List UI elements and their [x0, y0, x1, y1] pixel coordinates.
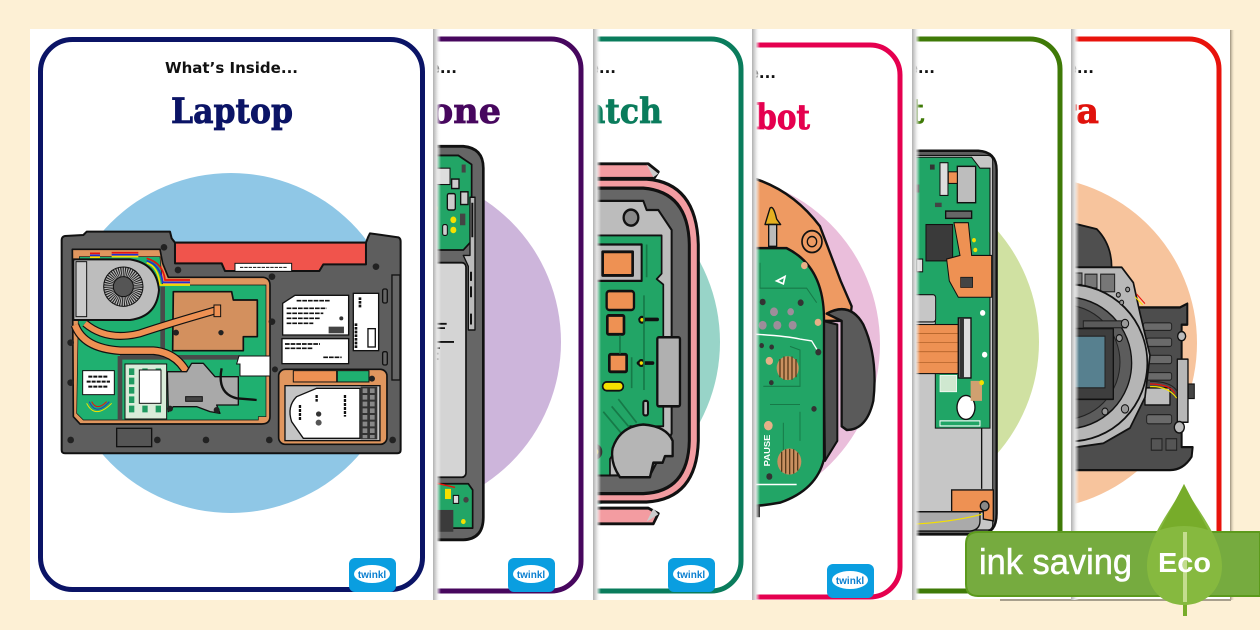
RAM and heat sink — [125, 364, 167, 419]
watch title: Smartwatch — [450, 90, 662, 131]
logo: twinkl — [508, 558, 555, 592]
logo: twinkl — [349, 558, 396, 592]
camera poster border — [900, 39, 1219, 591]
robot poster border — [580, 45, 900, 597]
copper plate — [173, 292, 257, 351]
tablet circle — [699, 172, 1039, 512]
camera heading: What’s Inside... — [961, 59, 1094, 77]
laptop circle — [61, 173, 401, 513]
hard drive — [279, 369, 387, 444]
left board labels — [83, 371, 114, 395]
leaf stem tail — [1183, 600, 1187, 616]
sticker labels — [283, 295, 349, 335]
icon: tablet internals — [883, 151, 997, 534]
banner label: ink saving — [979, 541, 1132, 582]
panel: tablet poster — [699, 29, 1079, 600]
banner bar — [966, 532, 1260, 596]
watch circle — [380, 172, 720, 512]
laptop title: Laptop — [171, 91, 293, 132]
phone circle — [221, 172, 561, 512]
panel: robot poster — [540, 29, 920, 600]
cables — [90, 253, 190, 280]
icon: laptop internals — [62, 232, 401, 453]
main compartment — [72, 249, 270, 424]
icon: leaf drop — [1147, 484, 1222, 605]
watch heading: What’s Inside... — [483, 59, 616, 77]
screws — [67, 244, 396, 443]
eco banner — [966, 484, 1260, 616]
robot title: Robot — [712, 97, 810, 138]
panel: camera poster — [863, 29, 1235, 601]
leaf stem — [1183, 532, 1187, 602]
phone title: Smartphone — [260, 91, 501, 132]
leaf top shade — [1160, 484, 1208, 530]
panel: smartphone poster — [221, 29, 601, 600]
icon: robot internals — [743, 175, 875, 517]
phone poster border — [260, 39, 581, 591]
logo: twinkl: twinkl — [677, 570, 705, 581]
tablet poster border — [740, 39, 1060, 591]
phone heading: What’s Inside... — [324, 59, 457, 77]
panel: laptop poster — [30, 29, 441, 600]
watch poster border — [420, 39, 741, 591]
inner dividers — [120, 287, 240, 420]
icon: watch internals — [587, 164, 698, 524]
robot heading: What’s Inside... — [643, 64, 776, 82]
logo: twinkl: twinkl — [836, 576, 864, 587]
fan — [73, 259, 159, 320]
icon: robot internals: PAUSE — [762, 435, 772, 466]
icon: camera internals — [993, 218, 1194, 470]
laptop base — [62, 232, 401, 453]
robot circle — [540, 174, 880, 514]
logo: twinkl — [827, 564, 874, 598]
latch — [117, 428, 152, 447]
logo: twinkl — [668, 558, 715, 592]
laptop heading: What’s Inside... — [165, 59, 298, 77]
logo: twinkl: twinkl — [358, 570, 386, 581]
camera circle — [863, 176, 1197, 510]
icon: phone internals — [427, 146, 483, 540]
heat pipes — [85, 310, 217, 336]
eco label: Eco — [1158, 547, 1211, 578]
logo: twinkl: twinkl — [517, 570, 545, 581]
tablet heading: What’s Inside... — [802, 59, 935, 77]
tablet title: Tablet — [802, 91, 924, 132]
side slots — [392, 275, 400, 380]
camera title: Camera — [948, 91, 1099, 132]
panel: smartwatch poster — [380, 29, 760, 600]
laptop poster border — [40, 40, 422, 590]
red bay — [175, 243, 366, 271]
